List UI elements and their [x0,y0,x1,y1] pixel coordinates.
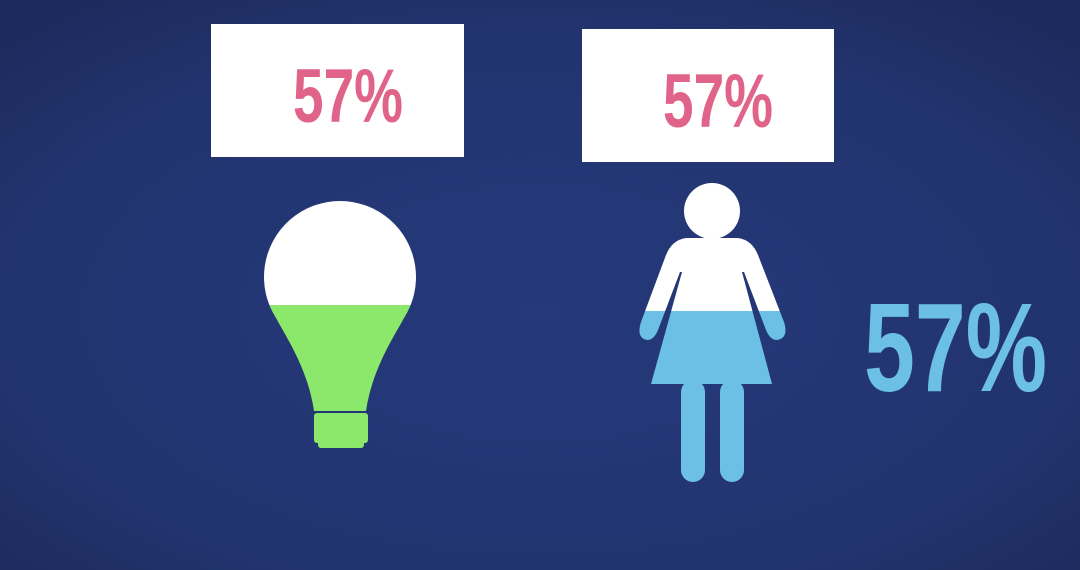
callout box 2 [582,29,834,162]
callout box 1: 57% [293,54,403,139]
icon: light bulb [264,201,416,448]
callout box 1 [211,24,464,157]
icon: woman [639,183,785,482]
callout box 2: 57% [663,59,773,144]
